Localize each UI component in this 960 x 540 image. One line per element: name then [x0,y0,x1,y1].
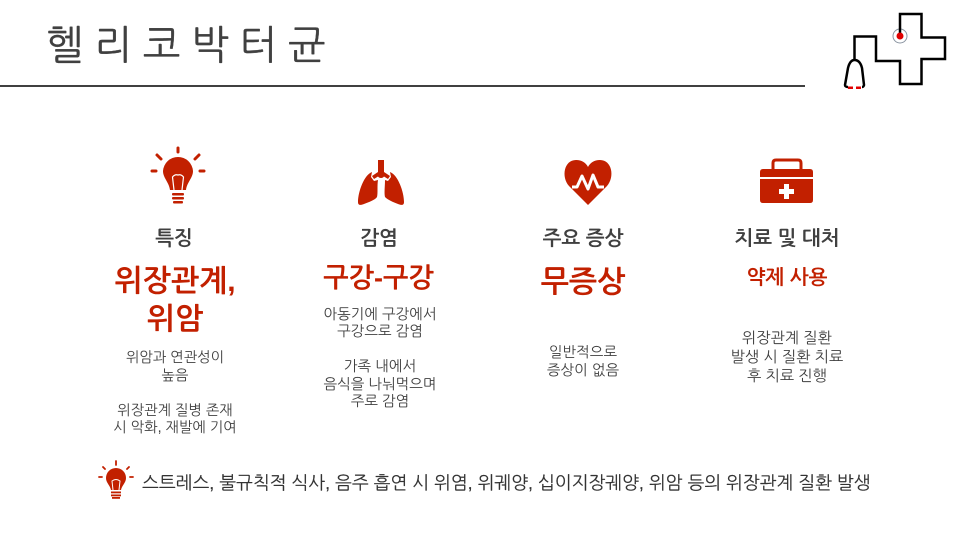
description [323,306,437,410]
description: 위장관계 질환 [742,330,832,347]
description: 가족 내에서 [344,359,416,375]
icon: stethoscope cross [844,12,946,89]
description: 시 악화, 재발에 기여 [113,420,237,436]
description: 위장관계 질병 존재 [117,402,233,418]
description: 증상이 없음 [547,362,619,378]
description: 주로 감염 [351,394,409,410]
heading: 특징 [155,228,193,250]
panel: 주요 증상 [541,160,626,378]
icon: small light bulb [98,460,134,499]
heading: 감염 [360,228,398,250]
title: 헬리코박터균 [46,25,336,65]
callout [98,460,871,499]
description: 발생 시 질환 치료 [731,349,843,366]
heading: 주요 증상 [543,228,623,250]
highlight: 무증상 [541,266,625,299]
description: 일반적으로 [549,345,617,361]
highlight: 약제 사용 [747,267,827,289]
highlight: 위장관계, [114,265,236,298]
icon: first aid kit [760,158,813,203]
highlight: 구강-구강 [323,263,434,293]
description: 구강으로 감염 [337,324,423,340]
heading: 치료 및 대처 [734,228,840,250]
description: 위암과 연관성이 [126,350,224,366]
panel: 감염 [323,160,437,410]
panel: 특징 [113,146,237,436]
highlight: 위암 [147,303,203,336]
icon: heart [564,160,612,205]
description [547,345,619,378]
panel: 치료 및 대처 [731,158,843,385]
description: 음식을 나눠먹으며 [323,376,437,392]
highlight [114,265,236,336]
callout text: 스트레스, 불규칙적 식사, 음주 흡연 시 위염, 위궤양, 십이지장궤양, 위암 등의 위장관계 질환 발생 [142,473,871,493]
description [113,350,237,436]
description: 높음 [162,368,188,384]
icon: light bulb [150,146,206,204]
description: 후 치료 진행 [747,368,827,385]
description: 아동기에 구강에서 [323,306,437,322]
icon: lungs [358,160,404,205]
description [731,330,843,385]
